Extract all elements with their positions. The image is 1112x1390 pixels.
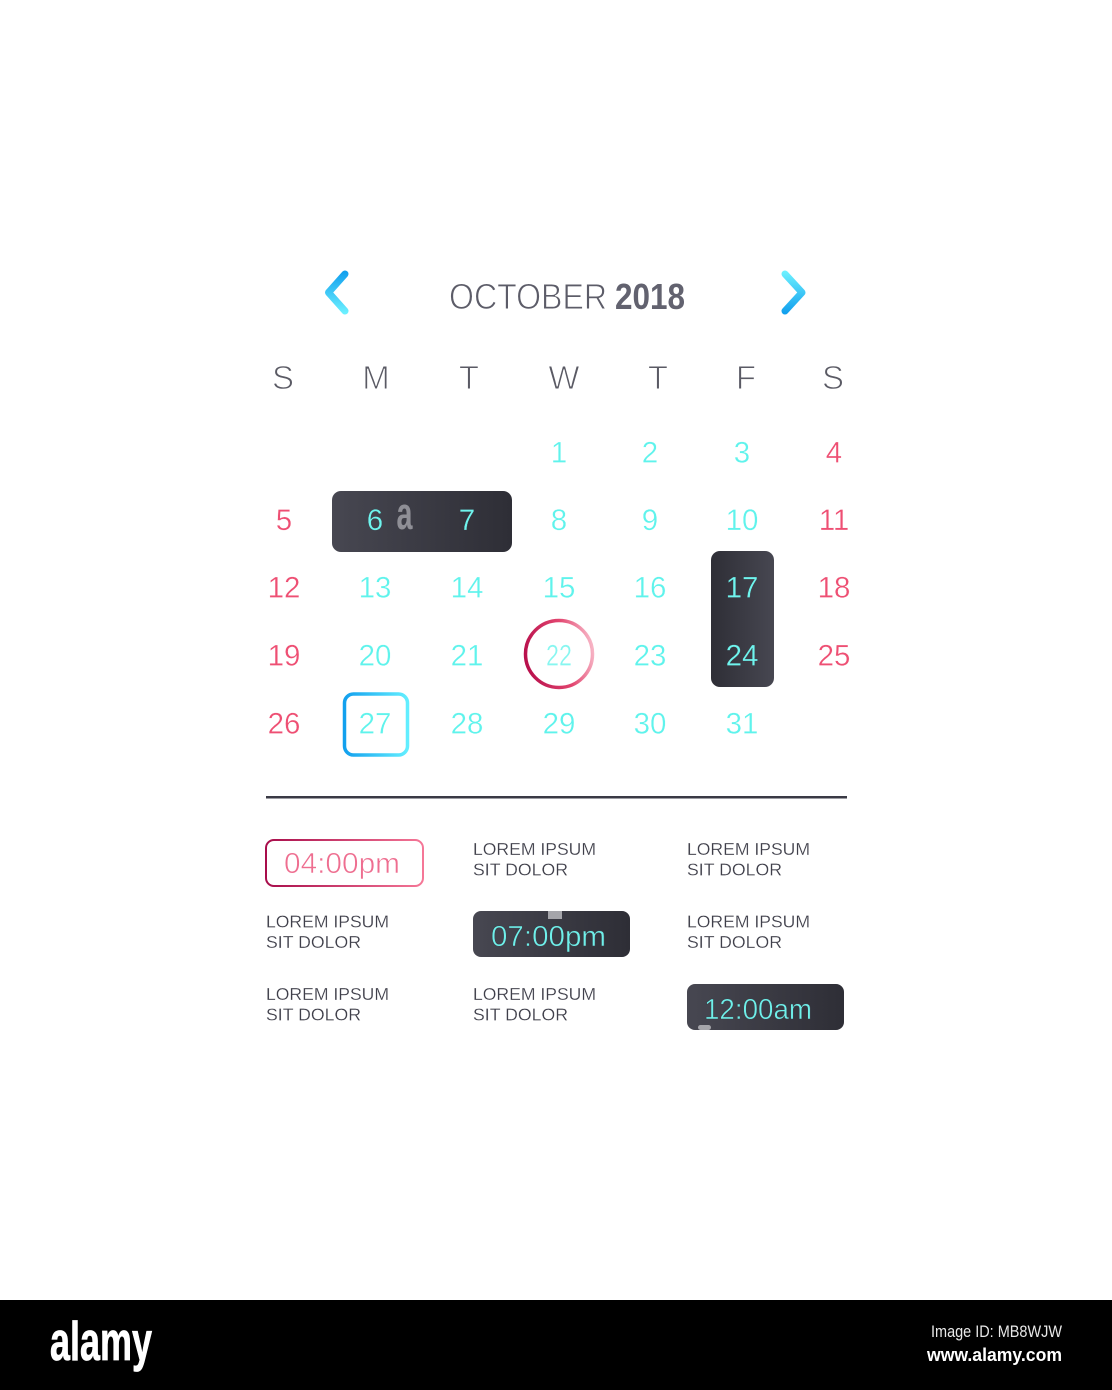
label: SIT DOLOR bbox=[687, 860, 782, 880]
calendar dates: 7 bbox=[459, 504, 475, 537]
calendar dates: 13 bbox=[359, 572, 391, 604]
label: SIT DOLOR bbox=[473, 860, 568, 880]
label: LOREM IPSUM bbox=[266, 984, 389, 1004]
calendar dates: 29 bbox=[543, 708, 575, 740]
calendar dates: 25 bbox=[818, 640, 850, 672]
label: LOREM IPSUM bbox=[266, 912, 389, 932]
calendar dates: 15 bbox=[543, 572, 575, 604]
label: SIT DOLOR bbox=[266, 932, 361, 952]
calendar dates: 24 bbox=[726, 640, 758, 672]
time chip: 07:00pm: 07:00pm bbox=[491, 921, 606, 953]
calendar dates: 20 bbox=[359, 640, 391, 672]
calendar dates: 10 bbox=[726, 504, 758, 537]
watermark fragment: a bbox=[396, 488, 413, 539]
calendar dates: 9 bbox=[642, 504, 658, 537]
website: www.alamy.com bbox=[926, 1345, 1062, 1365]
time chip: 12:00am: 12:00am bbox=[704, 994, 812, 1026]
label bbox=[687, 839, 810, 880]
calendar dates: 26 bbox=[268, 708, 300, 740]
highlight: square around date 27 bbox=[344, 694, 408, 755]
weekday headings: S bbox=[822, 359, 844, 396]
time chip: 04:00pm bbox=[266, 840, 423, 886]
divider bbox=[266, 796, 847, 798]
weekday headings: T bbox=[648, 359, 668, 396]
month and year title: 2018 bbox=[615, 276, 685, 317]
time chip: 12:00am bbox=[687, 984, 844, 1030]
weekday headings: W bbox=[548, 359, 580, 396]
calendar dates: 30 bbox=[634, 708, 666, 740]
calendar header bbox=[328, 274, 802, 317]
label bbox=[266, 984, 389, 1024]
label: LOREM IPSUM bbox=[687, 839, 810, 859]
calendar dates: 11 bbox=[819, 504, 849, 537]
calendar dates: 27 bbox=[359, 708, 391, 740]
time chip: 07:00pm bbox=[473, 911, 630, 957]
time chip: 04:00pm: 04:00pm bbox=[284, 848, 400, 880]
icon: previous month arrow bbox=[328, 274, 345, 311]
calendar dates: 3 bbox=[734, 436, 750, 470]
weekday headings: S bbox=[272, 359, 294, 396]
label bbox=[473, 984, 596, 1024]
highlight: ring around date 22 bbox=[526, 620, 592, 688]
calendar dates: 14 bbox=[451, 572, 483, 604]
footer bar bbox=[0, 1300, 1112, 1390]
calendar dates bbox=[268, 436, 850, 740]
highlight: dates 17 and 24 bbox=[711, 551, 774, 687]
image id: Image ID: MB8WJW bbox=[931, 1322, 1062, 1341]
calendar dates: 21 bbox=[451, 640, 483, 672]
label bbox=[266, 912, 389, 952]
weekday headings: T bbox=[459, 359, 479, 396]
calendar dates: 18 bbox=[818, 572, 850, 604]
calendar dates: 2 bbox=[642, 436, 658, 470]
highlight: dates 6 and 7 bbox=[332, 491, 512, 552]
calendar dates: 28 bbox=[451, 708, 483, 740]
label: SIT DOLOR bbox=[473, 1004, 568, 1024]
weekday headings: F bbox=[736, 359, 756, 396]
calendar dates: 6 bbox=[367, 504, 383, 537]
month and year title: OCTOBER bbox=[449, 276, 607, 317]
calendar dates: 12 bbox=[268, 572, 300, 604]
calendar dates: 16 bbox=[634, 572, 666, 604]
label: LOREM IPSUM bbox=[687, 912, 810, 932]
calendar dates: 31 bbox=[726, 708, 758, 740]
calendar dates: 19 bbox=[268, 640, 300, 672]
calendar dates: 5 bbox=[276, 504, 292, 537]
calendar dates: 23 bbox=[634, 640, 666, 672]
calendar dates: 17 bbox=[726, 572, 758, 604]
weekday headings: M bbox=[362, 359, 390, 396]
label: LOREM IPSUM bbox=[473, 984, 596, 1004]
label bbox=[687, 912, 810, 952]
calendar dates: 4 bbox=[826, 436, 842, 470]
label: LOREM IPSUM bbox=[473, 839, 596, 859]
label bbox=[473, 839, 596, 880]
calendar dates: 22 bbox=[546, 640, 572, 672]
calendar dates: 1 bbox=[551, 436, 567, 470]
weekday headings bbox=[272, 359, 844, 396]
footer logo: alamy bbox=[50, 1310, 152, 1372]
label: SIT DOLOR bbox=[687, 932, 782, 952]
icon: next month arrow bbox=[785, 274, 802, 311]
calendar dates: 8 bbox=[551, 504, 567, 537]
label: SIT DOLOR bbox=[266, 1004, 361, 1024]
schedule list bbox=[266, 839, 844, 1030]
